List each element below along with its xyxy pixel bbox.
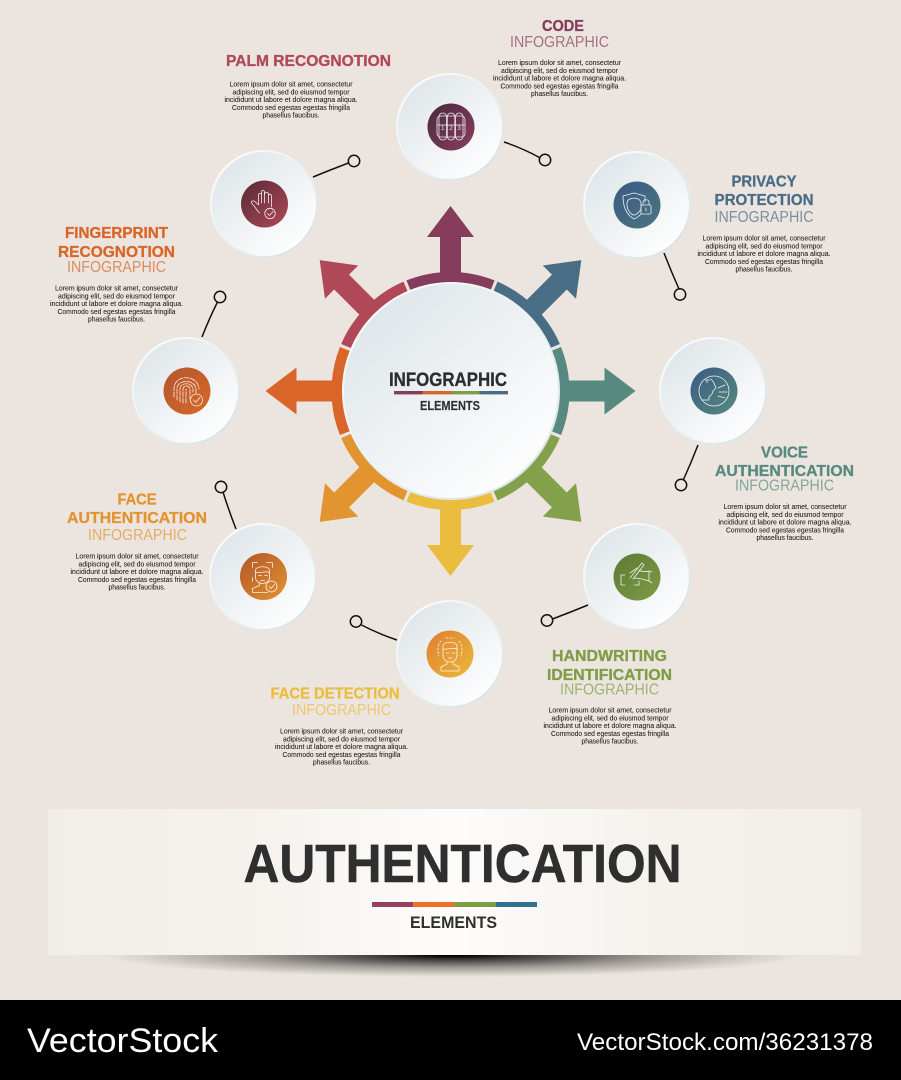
text: fingerprint recognition: incididunt ut labore et dolore magna aliqua. — [50, 299, 183, 308]
arrow: east — [552, 349, 636, 433]
text: face authentication: phasellus faucibus. — [108, 582, 166, 592]
text: handwriting identification: INFOGRAPHIC — [560, 682, 659, 698]
connector: privacy — [664, 253, 686, 300]
text: fingerprint recognition: phasellus faucibus. — [88, 314, 145, 324]
footer bar — [0, 1000, 901, 1080]
connector: face detection — [350, 616, 397, 640]
text: fingerprint recognition: RECOGNOTION — [58, 244, 175, 261]
text: face authentication: adipiscing elit, sed do eiusmod tempor — [78, 559, 196, 568]
icon: palm check — [251, 190, 275, 219]
arrow: south-west — [290, 433, 409, 551]
text: voice authentication: phasellus faucibus. — [756, 533, 814, 542]
icon: face check — [252, 562, 277, 592]
text: code: CODE — [542, 18, 584, 35]
text: code: incididunt ut labore et dolore magna aliqua. — [493, 74, 626, 82]
connector: face authentication — [215, 481, 236, 529]
text: handwriting identification: Lorem ipsum dolor sit amet, consectetur — [548, 706, 672, 714]
text: fingerprint recognition: FINGERPRINT — [65, 225, 169, 242]
node: palm — [211, 151, 317, 257]
text: face detection: INFOGRAPHIC — [292, 702, 391, 719]
icon: code lock: 2 — [449, 126, 453, 132]
text: fingerprint recognition — [50, 225, 183, 324]
arrow: north-west — [290, 231, 409, 349]
text: palm recognition: incididunt ut labore et dolore magna aliqua. — [224, 95, 358, 104]
central hub — [343, 283, 559, 499]
text: palm recognition: Commodo sed egestas egestas fringilla — [232, 103, 351, 112]
icon: face detection — [438, 638, 462, 671]
node: face authentication — [210, 524, 316, 630]
connector: palm — [313, 155, 360, 177]
banner — [48, 809, 861, 955]
text: privacy protection: phasellus faucibus. — [736, 264, 792, 274]
arrow: west — [266, 349, 350, 433]
text: privacy protection: INFOGRAPHIC — [714, 209, 814, 226]
text: voice authentication: VOICE — [761, 444, 808, 462]
text: handwriting identification: phasellus faucibus. — [582, 736, 638, 746]
hub colour bar — [394, 391, 508, 394]
text: face detection: incididunt ut labore et dolore magna aliqua. — [275, 742, 408, 751]
arrow: south-east — [492, 433, 611, 551]
text: voice authentication: adipiscing elit, sed do eiusmod tempor — [726, 510, 844, 519]
text: palm recognition: adipiscing elit, sed do eiusmod tempor — [232, 87, 350, 96]
text: handwriting identification: adipiscing elit, sed do eiusmod tempor — [552, 713, 669, 722]
footer logo: VectorStock — [27, 1022, 219, 1060]
text: fingerprint recognition: INFOGRAPHIC — [67, 259, 166, 276]
icon: voice — [699, 376, 729, 406]
text: face authentication: AUTHENTICATION — [67, 510, 207, 527]
icon: code lock: 3 — [458, 126, 462, 132]
text: handwriting identification — [544, 648, 676, 746]
hub subheading: ELEMENTS — [420, 399, 480, 413]
text: code: Commodo sed egestas egestas fringilla — [500, 81, 619, 90]
icon: shield lock — [623, 193, 651, 219]
text: face authentication: Lorem ipsum dolor sit amet, consectetur — [76, 552, 199, 560]
arrow: south — [409, 492, 492, 576]
text: code: adipiscing elit, sed do eiusmod tempor — [501, 66, 618, 75]
connector: code — [504, 142, 551, 166]
text: code: Lorem ipsum dolor sit amet, consectetur — [498, 58, 621, 67]
node: code — [397, 74, 503, 180]
icon: code lock: 1 — [441, 126, 445, 132]
node: voice — [660, 338, 766, 444]
text: privacy protection: Commodo sed egestas egestas fringilla — [705, 257, 824, 266]
hub heading: INFOGRAPHIC — [389, 370, 507, 391]
text: fingerprint recognition: Lorem ipsum dolor sit amet, consectetur — [55, 284, 178, 292]
text: handwriting identification: incididunt ut labore et dolore magna aliqua. — [544, 721, 676, 730]
text: palm recognition: PALM RECOGNOTION — [226, 53, 391, 70]
icon: code lock — [437, 113, 465, 140]
banner colour bar — [372, 902, 537, 907]
text: code: INFOGRAPHIC — [510, 34, 609, 51]
node: face detection — [397, 601, 503, 707]
text: palm recognition: phasellus faucibus. — [262, 110, 320, 120]
text: fingerprint recognition: Commodo sed egestas egestas fringilla — [58, 307, 176, 316]
connector: voice — [675, 445, 698, 491]
banner shadow — [120, 955, 784, 976]
footer url: VectorStock.com/36231378 — [577, 1029, 873, 1056]
text: privacy protection: PRIVACY — [732, 174, 797, 190]
text: handwriting identification: HANDWRITING — [552, 648, 667, 665]
text: privacy protection: PROTECTION — [714, 192, 814, 209]
text: face detection: phasellus faucibus. — [313, 758, 370, 766]
text: voice authentication: incididunt ut labore et dolore magna aliqua. — [718, 518, 852, 526]
text: code: phasellus faucibus. — [531, 89, 588, 98]
node: privacy — [584, 152, 690, 258]
connector: handwriting — [541, 605, 588, 626]
text: handwriting identification: IDENTIFICATION — [547, 667, 672, 684]
icon: handwriting — [621, 563, 652, 585]
node: fingerprint — [133, 338, 239, 444]
text: face authentication — [67, 492, 207, 592]
banner title: AUTHENTICATION — [244, 834, 682, 894]
arrow: top — [409, 206, 492, 290]
arrow: north-east — [492, 231, 611, 349]
text: face detection: Commodo sed egestas egestas fringilla — [282, 750, 401, 759]
text: voice authentication: INFOGRAPHIC — [735, 478, 834, 494]
text: face detection: FACE DETECTION — [270, 686, 400, 702]
text: face detection: Lorem ipsum dolor sit amet, consectetur — [280, 726, 403, 736]
node: handwriting — [584, 524, 690, 630]
text: voice authentication: AUTHENTICATION — [715, 463, 854, 480]
text: voice authentication — [715, 444, 854, 542]
banner subtitle: ELEMENTS — [410, 913, 497, 932]
icon: fingerprint check — [174, 378, 202, 406]
text: privacy protection — [698, 174, 830, 274]
text: privacy protection: adipiscing elit, sed do eiusmod tempor — [706, 241, 823, 250]
text: face authentication: Commodo sed egestas egestas fringilla — [78, 575, 197, 584]
text: voice authentication: Lorem ipsum dolor sit amet, consectetur — [724, 502, 847, 511]
arrows ring — [266, 206, 636, 576]
text: handwriting identification: Commodo sed egestas egestas fringilla — [551, 729, 670, 738]
text: face detection: adipiscing elit, sed do eiusmod tempor — [283, 734, 400, 743]
text: palm recognition: Lorem ipsum dolor sit amet, consectetur — [230, 80, 353, 88]
connector: fingerprint — [202, 291, 226, 337]
text: voice authentication: Commodo sed egestas egestas fringilla — [726, 525, 845, 534]
text: privacy protection: incididunt ut labore et dolore magna aliqua. — [698, 249, 830, 258]
text: face authentication: INFOGRAPHIC — [88, 527, 187, 544]
text: code — [493, 18, 626, 98]
text: face authentication: FACE — [118, 492, 156, 508]
text: palm recognition — [224, 53, 391, 120]
text: face detection — [270, 686, 408, 766]
text: fingerprint recognition: adipiscing elit, sed do eiusmod tempor — [58, 291, 175, 300]
text: face authentication: incididunt ut labore et dolore magna aliqua. — [70, 567, 204, 576]
text: privacy protection: Lorem ipsum dolor sit amet, consectetur — [702, 234, 826, 242]
